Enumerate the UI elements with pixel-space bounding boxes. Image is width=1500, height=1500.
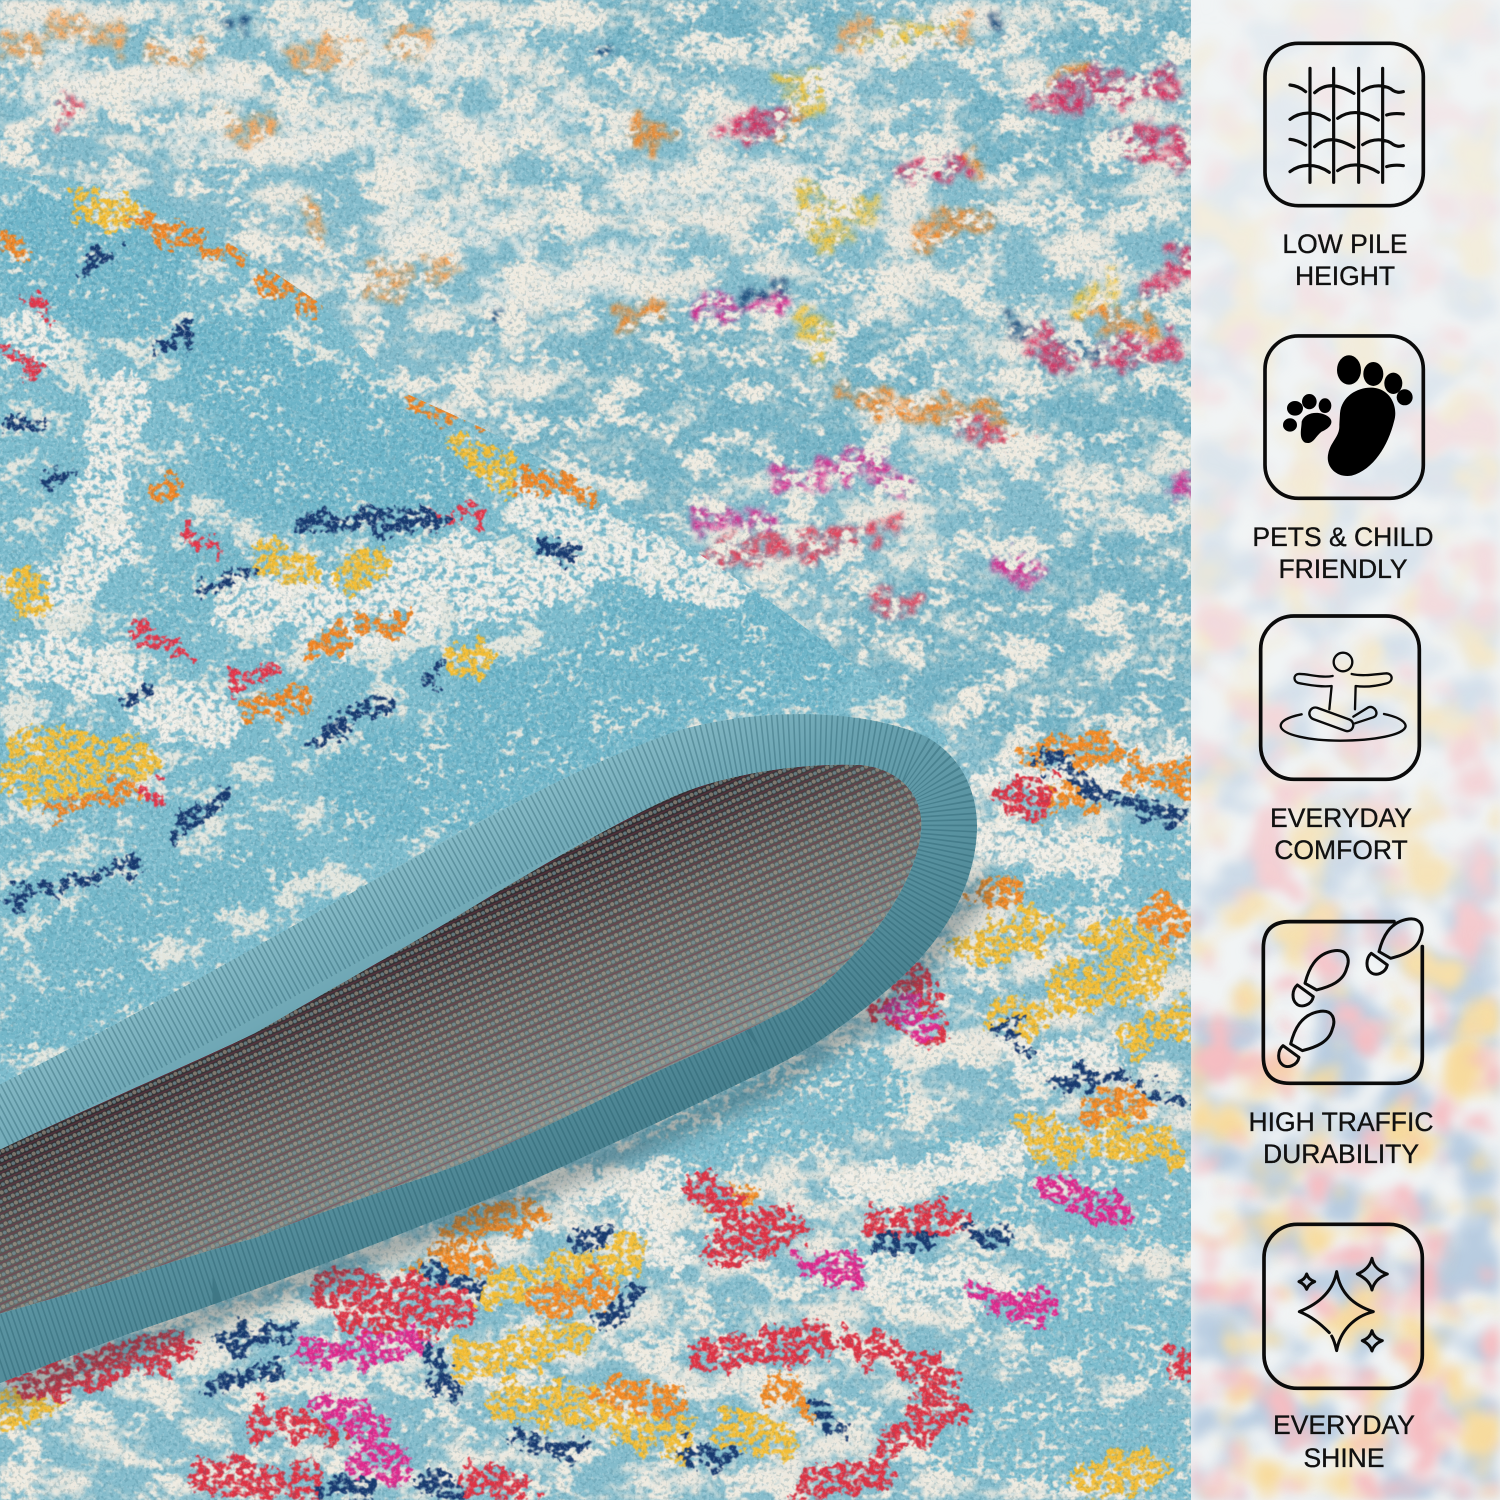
label: high traffic durability: DURABILITY [1263,1139,1419,1169]
rug cast shadow [0,880,985,1395]
rug underside weave [0,765,921,1315]
feature: low pile height [1265,43,1423,291]
icon: sparkles [1264,1224,1422,1388]
label: everyday comfort: EVERYDAY [1270,803,1412,833]
feature: everyday shine [1264,1224,1422,1473]
icon: seated meditation figure [1261,616,1419,779]
icon: child foot and paw print [1265,336,1423,498]
label: low pile height: HEIGHT [1295,261,1395,291]
icon: shoe prints [1263,919,1422,1083]
label: everyday shine: EVERYDAY [1273,1410,1415,1440]
rolled rug top face [0,170,953,1084]
feature: everyday comfort [1261,616,1419,865]
rug field: teal and multicolour pile pattern on the floor [0,0,1191,1500]
label: everyday comfort: COMFORT [1274,835,1408,865]
icon: woven pile grid [1265,43,1423,206]
label: pets and child friendly: FRIENDLY [1278,554,1408,584]
photo: rolled patterned rug [0,0,1191,1500]
feature: high traffic durability [1248,919,1434,1169]
feature: pets and child friendly [1252,336,1434,584]
label: pets and child friendly: PETS & CHILD [1252,522,1434,552]
panel: product features sidebar [1191,0,1500,1500]
label: high traffic durability: HIGH TRAFFIC [1248,1107,1434,1137]
rug binding edge [0,714,977,1385]
label: everyday shine: SHINE [1304,1443,1384,1473]
label: low pile height: LOW PILE [1282,229,1408,259]
